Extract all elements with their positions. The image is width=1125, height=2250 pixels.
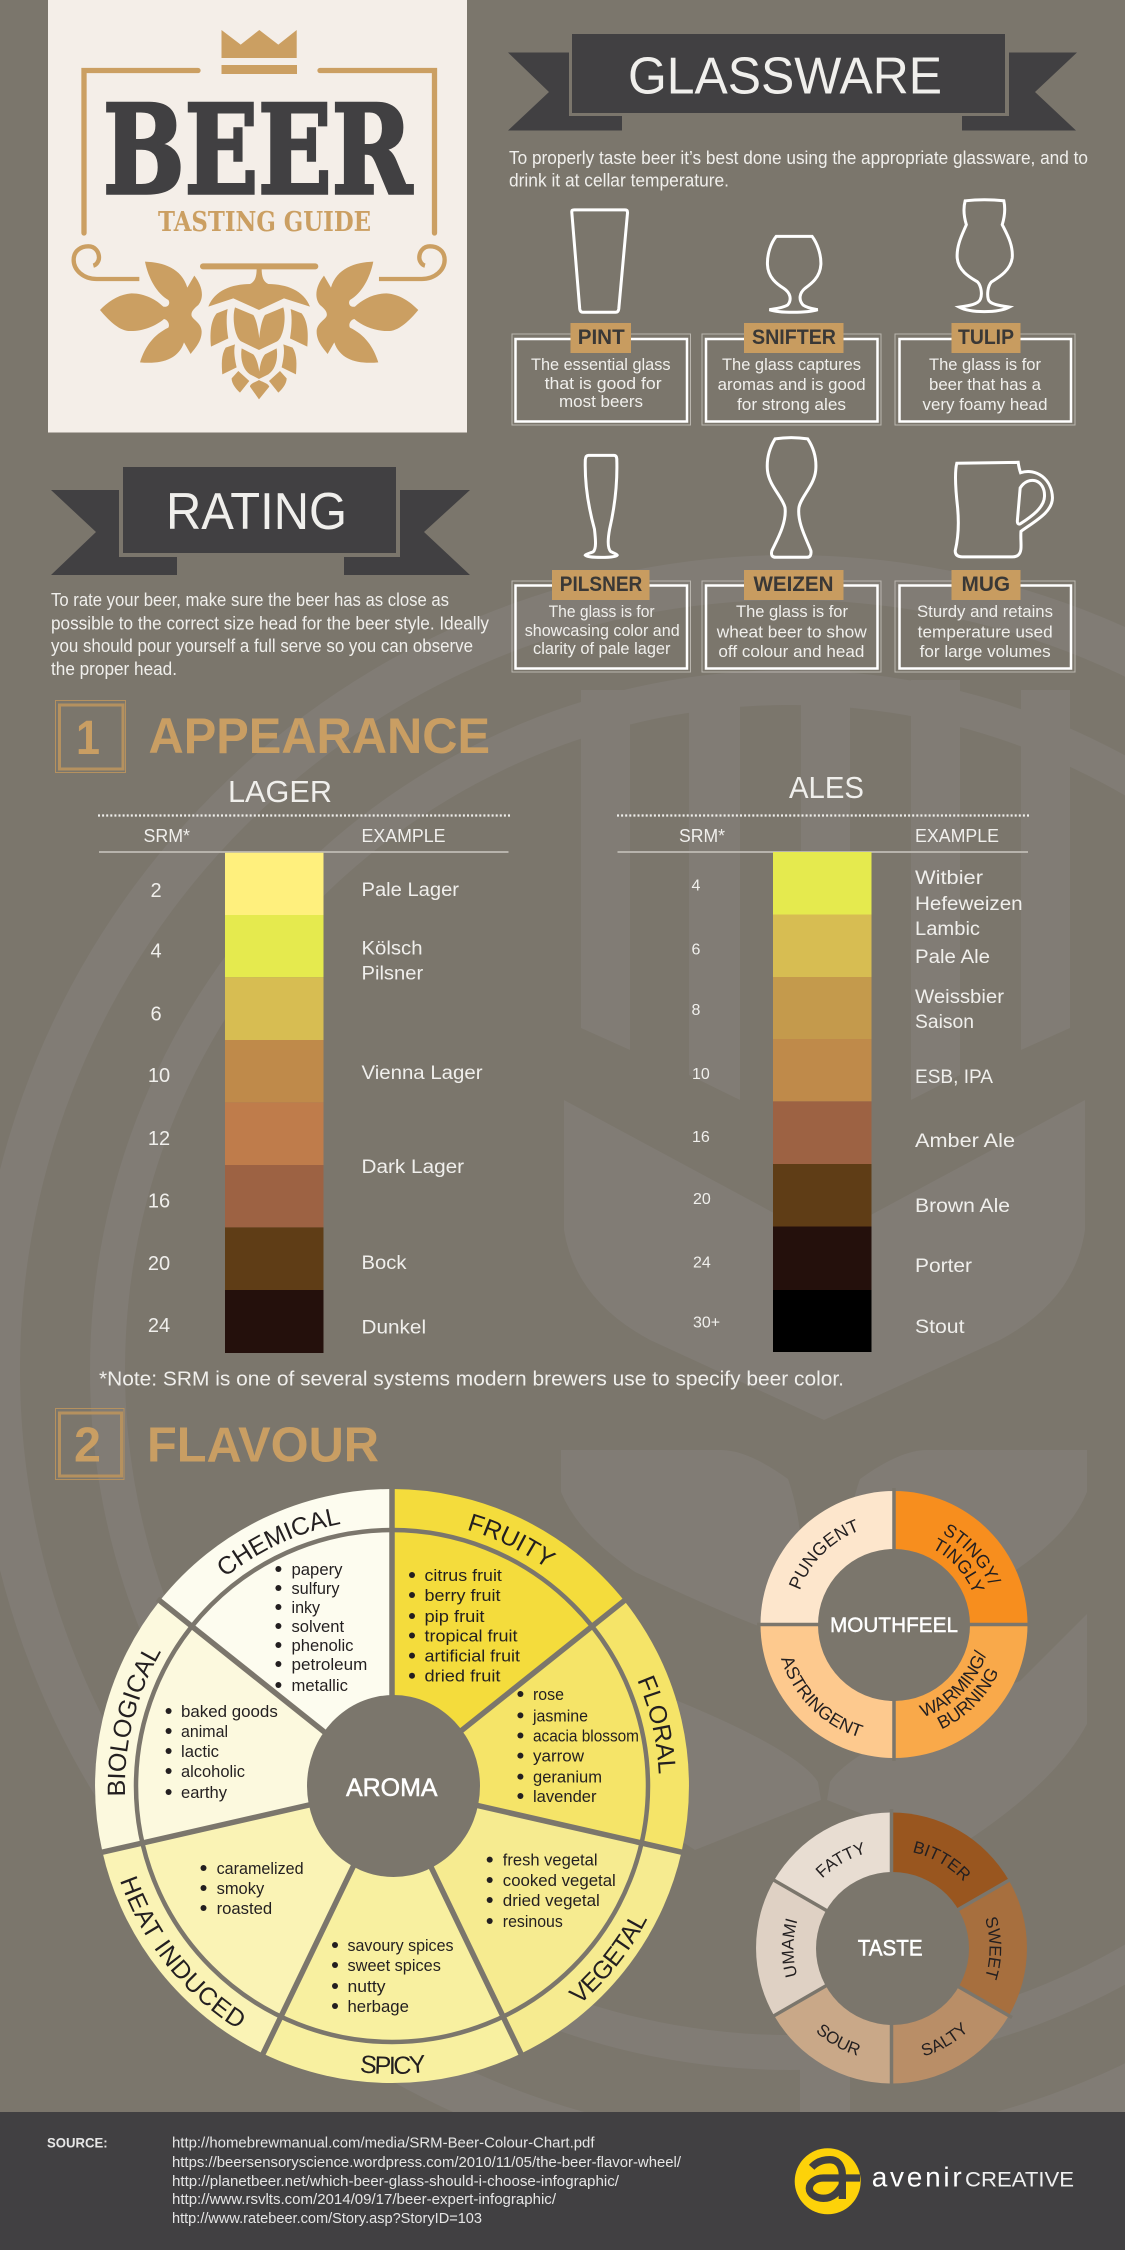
examples: Brown Ale [915, 1196, 1010, 1217]
list: chemical: inky [292, 1598, 321, 1617]
list: biological: earthy [181, 1783, 227, 1802]
list: chemical [275, 1560, 367, 1695]
text: rating intro: To rate your beer, make sure the beer has as close as [51, 590, 449, 610]
list: fruity: artificial fruit [424, 1647, 520, 1666]
color bars [225, 853, 324, 1353]
sector labels [108, 1509, 676, 2074]
panel: pint: PINT [578, 326, 625, 349]
text: rating intro [51, 590, 489, 679]
panel: tulip: very foamy head [922, 395, 1048, 414]
chart: taste wheel [756, 1809, 1027, 2084]
list: biological: alcoholic [181, 1762, 245, 1781]
mouthfeel labels: PUNGENT [788, 1519, 856, 1590]
taste labels: FATTY [815, 1842, 862, 1878]
panel: weizen: The glass is for [736, 602, 848, 621]
list: heat induced: smoky [217, 1879, 265, 1898]
source list: http://planetbeer.net/which-beer-glass-should-i-choose-infographic/ [172, 2173, 620, 2190]
footer [0, 2112, 1125, 2250]
panel: pint: most beers [559, 392, 643, 411]
taste labels: BITTER [914, 1841, 970, 1882]
SRM values: 30+ [693, 1314, 720, 1332]
text: glassware intro [509, 148, 1088, 190]
panel: mug [895, 570, 1075, 672]
note: *Note: SRM is one of several systems modern brewers use to specify beer color. [99, 1368, 844, 1390]
panel: pilsner [512, 570, 690, 672]
logo: avenir creative: CREATIVE [965, 2168, 1074, 2192]
list: fruity: berry fruit [424, 1586, 501, 1605]
list: chemical: papery [292, 1560, 343, 1579]
logo frame [84, 70, 434, 233]
chart: ales SRM scale: SRM* [679, 826, 725, 846]
sector labels: FRUITY [468, 1514, 556, 1565]
chart: lager SRM scale: EXAMPLE [362, 826, 446, 846]
list: spicy: savoury spices [348, 1936, 454, 1955]
source list: http://www.ratebeer.com/Story.asp?StoryID=103 [172, 2210, 482, 2227]
panel: tulip: The glass is for [929, 355, 1041, 374]
chart: aroma wheel [95, 1489, 689, 2083]
list: biological: lactic [181, 1742, 219, 1761]
list: chemical: sulfury [292, 1579, 340, 1598]
color bars [773, 852, 872, 1352]
panel: tulip: beer that has a [929, 375, 1042, 394]
SRM values: 24 [148, 1315, 170, 1337]
panel: snifter: The glass captures [722, 355, 861, 374]
chart: lager SRM scale: LAGER [228, 774, 332, 809]
heading: flavour: FLAVOUR [147, 1419, 379, 1473]
SRM values: 4 [692, 878, 700, 894]
list: spicy [332, 1936, 454, 2016]
list: fruity: tropical fruit [424, 1626, 518, 1646]
taste labels: UMAMI [782, 1918, 797, 1978]
sector labels: HEAT INDUCED [120, 1876, 244, 2026]
list: fruity: citrus fruit [424, 1566, 502, 1585]
SRM values [148, 880, 170, 1337]
list: vegetal [487, 1851, 616, 1931]
SRM values: 6 [692, 942, 700, 959]
panel: snifter: for strong ales [737, 395, 846, 414]
text: glassware intro: To properly taste beer it’s best done using the appropriate glassware, and to [509, 148, 1088, 168]
list: spicy: herbage [348, 1997, 409, 2016]
examples: Kölsch [362, 939, 422, 960]
SRM values: 4 [150, 940, 162, 962]
sector labels: SPICY [361, 2055, 424, 2074]
sector labels: VEGETAL [568, 1918, 648, 2000]
panel: pilsner: PILSNER [560, 573, 642, 596]
SRM values: 8 [692, 1002, 700, 1019]
SRM values: 6 [150, 1004, 162, 1026]
SRM values: 20 [693, 1191, 711, 1208]
list: fruity [409, 1566, 520, 1686]
list: floral [517, 1685, 639, 1806]
panel: mug: Sturdy and retains [917, 602, 1053, 621]
examples: Pale Ale [915, 947, 990, 968]
heading: appearance: APPEARANCE [148, 708, 490, 764]
list: vegetal: cooked vegetal [503, 1871, 616, 1890]
list: floral: acacia blossom [533, 1726, 639, 1746]
taste labels: SWEET [986, 1917, 1002, 1980]
mouthfeel labels: TINGLY [936, 1538, 985, 1590]
source list: SOURCE: [47, 2135, 108, 2151]
mouthfeel labels: STINGY/ [944, 1524, 1002, 1583]
chart: mouthfeel wheel [757, 1488, 1028, 1761]
list: biological [166, 1702, 278, 1802]
panel: pint: that is good for [545, 374, 662, 393]
panel: snifter: SNIFTER [752, 326, 836, 349]
list: floral: lavender [533, 1787, 597, 1806]
SRM values: 10 [148, 1065, 170, 1087]
SRM values: 12 [148, 1128, 170, 1150]
list: vegetal: resinous [503, 1912, 563, 1931]
panel: beer tasting guide logo [48, 0, 467, 432]
list: heat induced: caramelized [217, 1859, 304, 1878]
source list: http://www.rsvlts.com/2014/09/17/beer-expert-infographic/ [172, 2191, 557, 2208]
heading: flavour: 2 [74, 1419, 101, 1473]
list: floral: yarrow [533, 1747, 585, 1766]
subtitle: tasting guide: TASTING GUIDE [158, 207, 371, 238]
examples: Stout [915, 1317, 965, 1338]
panel: pilsner: The glass is for [549, 602, 655, 621]
list: chemical: phenolic [292, 1636, 354, 1655]
mouthfeel labels: BURNING [937, 1668, 997, 1729]
list: vegetal: fresh vegetal [503, 1851, 598, 1870]
chart: taste wheel: TASTE [858, 1936, 923, 1960]
list: chemical: metallic [292, 1676, 348, 1695]
panel: snifter [702, 323, 881, 425]
chart: lager SRM scale: SRM* [144, 826, 190, 846]
icon: weizen glass [767, 438, 816, 557]
icon: hop with leaves [74, 246, 445, 399]
text: glassware intro: drink it at cellar temperature. [509, 170, 729, 190]
list: heat induced: roasted [217, 1899, 272, 1918]
panel: weizen: wheat beer to show [716, 622, 868, 642]
panel: weizen [702, 570, 881, 672]
icon: snifter glass [767, 236, 821, 312]
panel: mug: for large volumes [920, 642, 1051, 661]
source list: https://beersensoryscience.wordpress.com/2010/11/05/the-beer-flavor-wheel/ [172, 2154, 682, 2171]
SRM values: 16 [148, 1191, 170, 1213]
heading ribbon: rating: RATING [166, 483, 347, 541]
list: chemical: petroleum [292, 1655, 367, 1674]
examples: Porter [915, 1256, 973, 1277]
panel: weizen: WEIZEN [754, 573, 834, 596]
icon: crown [222, 30, 297, 74]
examples: Weissbier [915, 987, 1005, 1008]
panel: pint [512, 323, 690, 425]
icon: pint glass [572, 210, 628, 312]
panel: mug: temperature used [918, 622, 1053, 642]
chart: ales SRM scale: EXAMPLE [915, 826, 999, 846]
heading: appearance [56, 700, 490, 772]
source list [47, 2135, 682, 2227]
list: fruity: pip fruit [424, 1607, 485, 1626]
list: fruity: dried fruit [424, 1667, 501, 1686]
mouthfeel labels: ASTRINGENT [780, 1658, 864, 1736]
examples: Lambic [915, 919, 980, 940]
heading ribbon: rating [51, 467, 470, 575]
taste labels [782, 1841, 1002, 2056]
list: heat induced [200, 1859, 304, 1918]
examples: Vienna Lager [362, 1063, 483, 1084]
heading ribbon: glassware: GLASSWARE [628, 48, 942, 106]
taste labels: SOUR [817, 2024, 860, 2056]
SRM values: 24 [693, 1254, 711, 1272]
panel: weizen: off colour and head [718, 642, 864, 661]
list: spicy: nutty [348, 1977, 386, 1996]
list: biological: baked goods [181, 1702, 278, 1721]
wheel sectors [95, 1489, 689, 2083]
list: chemical: solvent [292, 1617, 344, 1636]
aroma centre [307, 1695, 480, 1877]
logo: avenir creative [795, 2148, 1074, 2214]
chart: lager SRM scale [98, 774, 511, 1353]
sector labels: CHEMICAL [218, 1509, 340, 1574]
text: rating intro: the proper head. [51, 659, 177, 679]
panel: snifter: aromas and is good [718, 375, 866, 394]
examples: Pilsner [362, 964, 424, 985]
heading ribbon: glassware [508, 34, 1077, 130]
panel: pint: The essential glass [531, 355, 670, 374]
SRM values: 2 [150, 880, 162, 902]
examples: Dunkel [362, 1318, 426, 1339]
examples: Witbier [915, 868, 984, 889]
text: rating intro: possible to the correct size head for the beer style. Ideally [51, 614, 489, 634]
title: BEER: BEER [103, 79, 413, 223]
heading: appearance: 1 [76, 712, 100, 765]
SRM values: 16 [692, 1129, 710, 1146]
examples: Pale Lager [362, 880, 460, 901]
panel: pilsner: showcasing color and [525, 621, 680, 640]
mouthfeel labels [780, 1519, 1002, 1736]
SRM values [692, 878, 720, 1332]
text: rating intro: you should pour yourself a full serve so you can observe [51, 636, 473, 656]
list: floral: geranium [533, 1768, 602, 1787]
icon: mug [955, 462, 1052, 557]
logo: avenir creative: avenir [872, 2162, 962, 2193]
examples: ESB, IPA [915, 1067, 993, 1088]
icon: pilsner glass [585, 455, 617, 557]
source list: http://homebrewmanual.com/media/SRM-Beer-Colour-Chart.pdf [172, 2135, 595, 2152]
SRM values: 20 [148, 1253, 170, 1275]
panel: tulip: TULIP [958, 326, 1014, 349]
examples: Hefeweizen [915, 894, 1023, 915]
panel: pilsner: clarity of pale lager [533, 639, 671, 658]
list: vegetal: dried vegetal [503, 1891, 600, 1910]
chart: ales SRM scale: ALES [789, 770, 864, 805]
chart: ales SRM scale [617, 770, 1029, 1352]
icon: tulip glass [957, 200, 1012, 312]
chart: mouthfeel wheel: MOUTHFEEL [830, 1614, 958, 1637]
aroma centre: AROMA [346, 1774, 438, 1802]
panel: tulip [895, 323, 1075, 425]
list: floral: rose [533, 1685, 564, 1704]
sector labels: FLORAL [638, 1675, 676, 1774]
SRM values: 10 [692, 1066, 710, 1083]
examples: Amber Ale [915, 1131, 1015, 1152]
examples: Dark Lager [362, 1157, 465, 1178]
panel: mug: MUG [962, 573, 1010, 596]
heading: flavour [56, 1408, 379, 1480]
examples [362, 880, 483, 1339]
list: floral: jasmine [532, 1706, 588, 1725]
taste labels: SALTY [922, 2022, 966, 2056]
examples [915, 868, 1023, 1338]
examples: Bock [362, 1253, 407, 1274]
list: spicy: sweet spices [348, 1956, 441, 1975]
mouthfeel labels: WARMING/ [918, 1649, 986, 1716]
examples: Saison [915, 1012, 974, 1033]
sector labels: BIOLOGICAL [108, 1651, 161, 1794]
list: biological: animal [181, 1722, 228, 1741]
